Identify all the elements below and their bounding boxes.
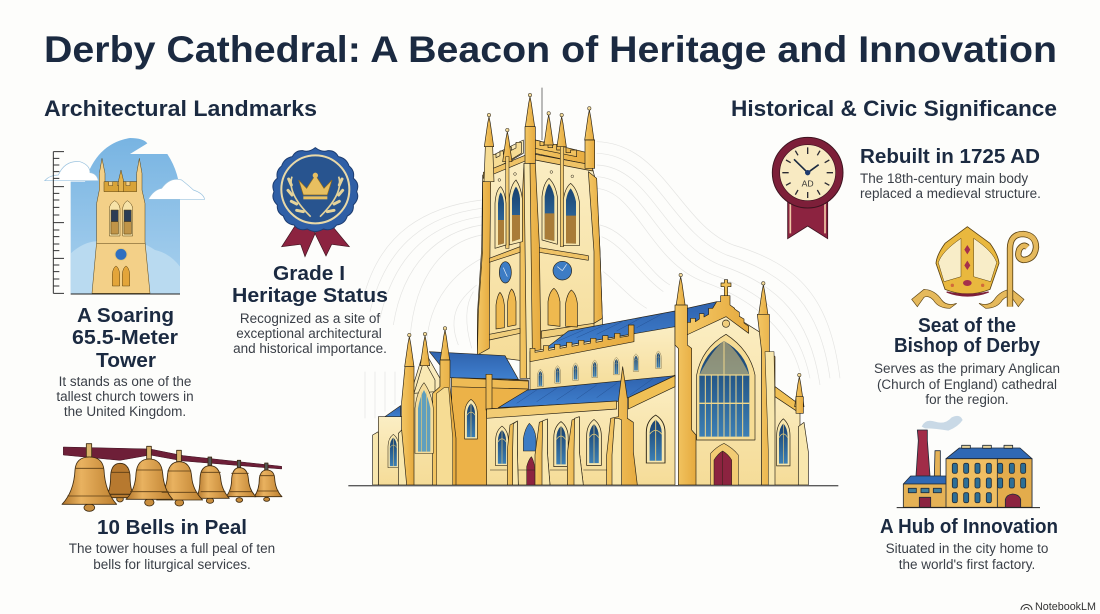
heading: bishop: [894, 315, 1041, 357]
great window: [697, 334, 755, 440]
text: bishop description: (Church of England) cathedral: [877, 377, 1057, 392]
heading: rebuilt: Rebuilt in 1725 AD: [860, 146, 1040, 168]
bell 4: [157, 450, 203, 506]
watermark: NotebookLM: NotebookLM: [1035, 601, 1096, 613]
text: heritage description: and historical importance.: [233, 341, 387, 356]
icon: tower with ruler and sky: [45, 138, 205, 294]
icon: clock medal: AD: [802, 179, 814, 189]
title: Derby Cathedral: A Beacon of Heritage and Innovation: [44, 29, 1057, 70]
heading: tower: A Soaring: [77, 305, 174, 327]
belfry windows: [495, 171, 579, 248]
heading: tower: Tower: [96, 350, 156, 372]
icon: heritage rosette: [273, 148, 358, 257]
bell 6: [226, 460, 256, 502]
icon: factory: [897, 416, 1040, 508]
heading: grade I: Heritage Status: [232, 285, 388, 307]
aisle wall: [487, 375, 675, 485]
text: bells description: The tower houses a full peal of ten: [69, 541, 275, 556]
panel: rebuilt 1725: [772, 137, 1041, 239]
heading: bishop: Bishop of Derby: [894, 335, 1041, 357]
heading: bishop: Seat of the: [918, 315, 1016, 337]
tower spires: [484, 88, 595, 248]
panel: soaring tower: [45, 138, 205, 419]
heading: tower: [72, 305, 178, 372]
heading: architectural landmarks: Architectural Landmarks: [44, 96, 317, 121]
bell 3: [126, 446, 173, 506]
transept buttresses and pinnacles: [675, 273, 777, 485]
central cathedral illustration: [348, 88, 840, 486]
tower: [477, 153, 602, 362]
aisle buttresses: [507, 367, 637, 485]
text: bishop description: Serves as the primary Anglican: [874, 361, 1060, 376]
aisle roof: [498, 376, 675, 408]
icon: mitre and crozier: [912, 227, 1036, 308]
left wing: [378, 417, 403, 485]
icon: bells on beam: [62, 444, 282, 511]
heading: innovation: A Hub of Innovation: [880, 516, 1058, 538]
aisle windows: [496, 415, 665, 485]
lower tower lancets: [496, 288, 577, 329]
south transept: [687, 311, 762, 485]
heading: bells: 10 Bells in Peal: [97, 517, 247, 539]
south door: [711, 443, 738, 485]
text: rebuilt description: replaced a medieval structure.: [860, 186, 1041, 201]
panel: ten bells: [62, 444, 282, 572]
text: heritage description: exceptional architectural: [236, 326, 382, 341]
nave clerestory: [530, 326, 675, 390]
heading: historical and civic significance: Historical & Civic Significance: [731, 96, 1057, 121]
icon: clock medal: [772, 137, 843, 239]
east end: [775, 387, 800, 485]
text: tower description: It stands as one of the: [59, 374, 191, 389]
heading: tower: 65.5-Meter: [72, 327, 178, 349]
text: tower description: tallest church towers in: [56, 389, 194, 404]
bell 2: [107, 463, 133, 502]
bell 7: [254, 463, 282, 501]
panel: grade I heritage status: [232, 148, 388, 356]
tower clocks: [499, 261, 572, 283]
text: tower description: the United Kingdom.: [64, 404, 186, 419]
panel: hub of innovation: [880, 416, 1058, 572]
text: innovation description: Situated in the city home to: [886, 541, 1048, 556]
text: rebuilt description: The 18th-century main body: [860, 171, 1028, 186]
bell 5: [197, 457, 229, 503]
text: bishop description: for the region.: [925, 392, 1009, 407]
nave upper windows: [538, 351, 661, 387]
heading: grade I: Grade I: [273, 263, 345, 285]
ground line: [348, 484, 838, 488]
panel: seat of the bishop: [874, 227, 1060, 407]
text: innovation description: the world's first factory.: [899, 557, 1035, 572]
bell 1: [62, 444, 117, 511]
heading: grade I: [232, 263, 388, 307]
nave roof: [545, 302, 717, 349]
text: bells description: bells for liturgical services.: [93, 557, 251, 572]
text: heritage description: Recognized as a site of: [240, 311, 380, 326]
